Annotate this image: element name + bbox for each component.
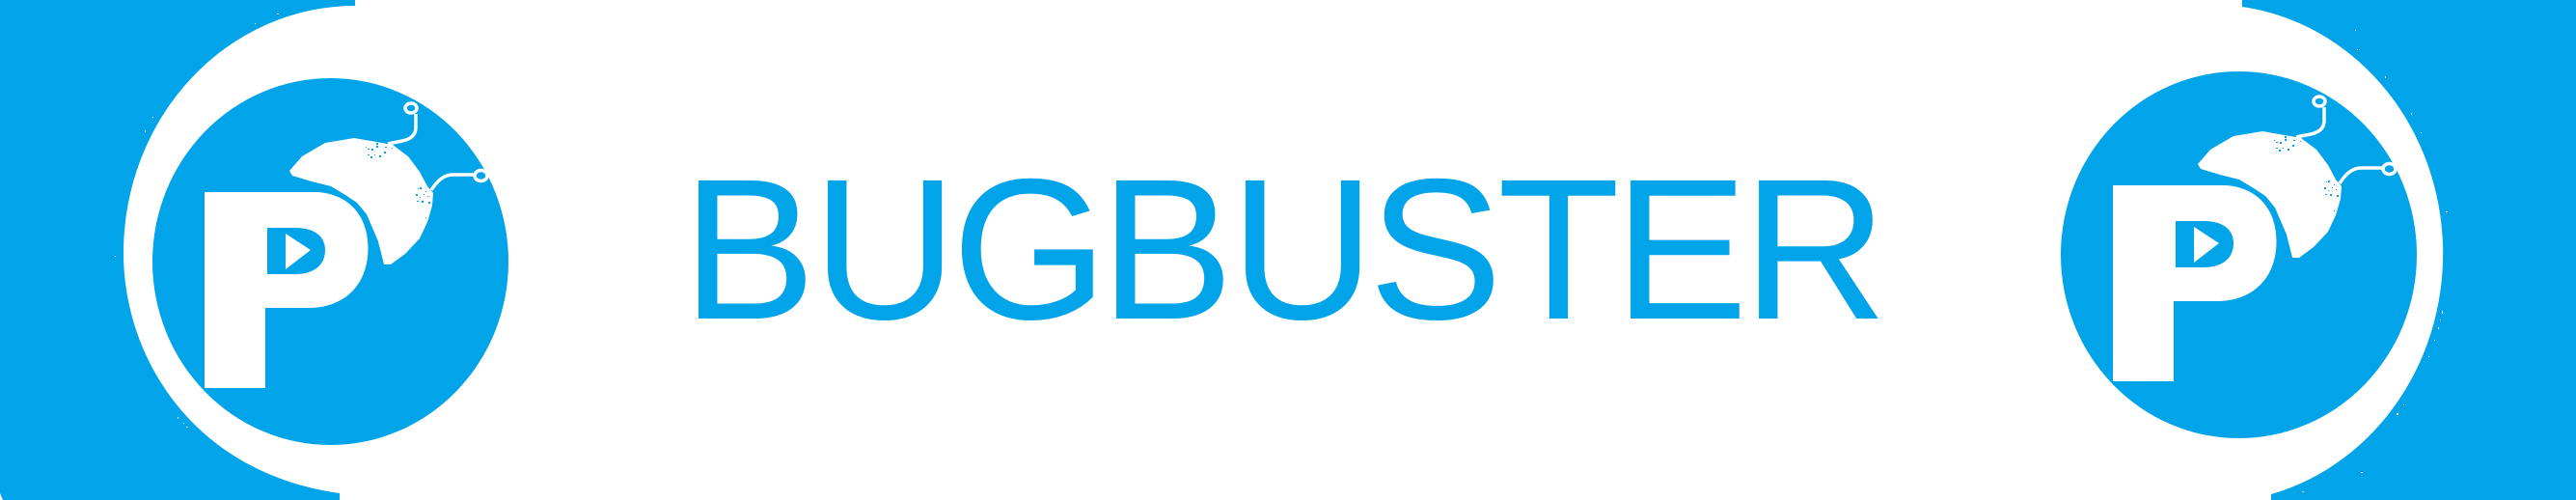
- title: BUGBUSTER: [682, 138, 1887, 362]
- bug speckles: [366, 143, 430, 218]
- icon: left logo: [152, 78, 508, 445]
- letter P with play button: [205, 192, 369, 388]
- bug body: [2198, 131, 2342, 258]
- upper antenna: [2296, 97, 2325, 137]
- play triangle: [286, 234, 311, 269]
- letter P with play button: [2113, 185, 2277, 381]
- logo disc: [152, 78, 508, 445]
- lower antenna: [431, 170, 487, 190]
- lower antenna: [2340, 164, 2396, 183]
- upper antenna: [388, 103, 417, 144]
- panel: left blue crescent background: [0, 0, 355, 500]
- bug speckles: [2274, 136, 2339, 211]
- logo disc: [2061, 71, 2417, 438]
- icon: right logo: [2061, 71, 2417, 438]
- bug body: [289, 138, 433, 264]
- panel: right blue crescent background: [2242, 0, 2576, 500]
- play triangle: [2194, 227, 2219, 263]
